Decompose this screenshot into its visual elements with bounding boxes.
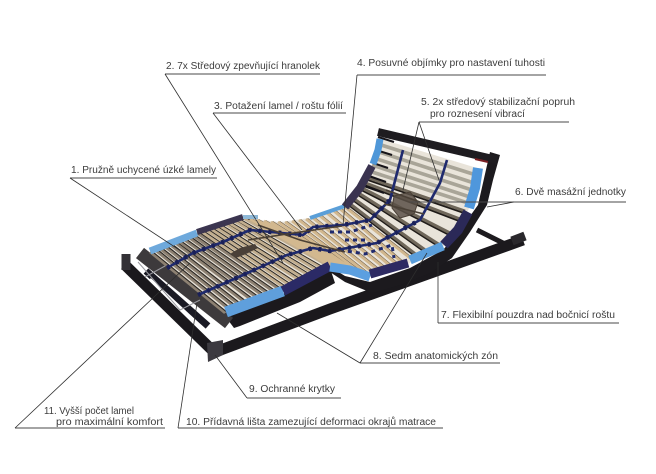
label 2: 2. 7x Středový zpevňující hranolek — [166, 61, 321, 72]
label 10: 10. Přídavná lišta zamezující deformaci okrajů matrace — [186, 416, 436, 428]
label 3 — [213, 101, 346, 230]
light foot clip lines — [138, 262, 200, 310]
label 11 — [15, 263, 190, 428]
central strip — [248, 225, 345, 252]
label 4 — [343, 58, 546, 225]
label 9: 9. Ochranné krytky — [249, 384, 335, 395]
label 3: 3. Potažení lamel / roštu fólií — [214, 101, 343, 112]
foot section underside — [225, 268, 335, 328]
label 2 — [165, 61, 321, 263]
label 1 — [70, 165, 217, 257]
slats: foot zone — [150, 217, 332, 313]
label 9 — [215, 355, 341, 398]
head bar red detail — [475, 159, 488, 162]
bed: slatted frame product illustration — [125, 132, 525, 362]
foot bar — [140, 253, 229, 323]
head bar — [378, 132, 497, 160]
label 6 — [410, 187, 626, 207]
label 10 — [178, 303, 443, 428]
label 1: 1. Pružně uchycené úzké lamely — [71, 165, 216, 176]
stabilising straps — [167, 150, 447, 295]
label 7: 7. Flexibilní pouzdra nad bočnicí roštu — [441, 310, 615, 321]
massage unit 1 — [230, 244, 258, 258]
label 5 — [403, 97, 575, 190]
label 6: 6. Dvě masážní jednotky — [515, 187, 626, 198]
label 4: 4. Posuvné objímky pro nastavení tuhosti — [357, 58, 545, 69]
massage unit 2 — [384, 190, 424, 218]
protective corner cap — [207, 340, 223, 362]
slats: middle zone — [250, 206, 412, 276]
label 8: 8. Sedm anatomických zón — [373, 351, 498, 362]
slat bed background — [150, 138, 477, 313]
label 11: pro maximální komfort — [56, 417, 163, 428]
flexible pockets: blue and purple slat ends — [150, 139, 478, 312]
base frame — [125, 230, 525, 351]
label 8 — [277, 253, 500, 363]
slats: head zone — [349, 137, 476, 258]
label 5: 5. 2x středový stabilizační popruh — [421, 97, 575, 108]
label 5: pro roznesení vibrací — [430, 109, 525, 120]
label 11: 11. Vyšší počet lamel — [44, 406, 134, 417]
head section curved side frame — [330, 152, 500, 293]
